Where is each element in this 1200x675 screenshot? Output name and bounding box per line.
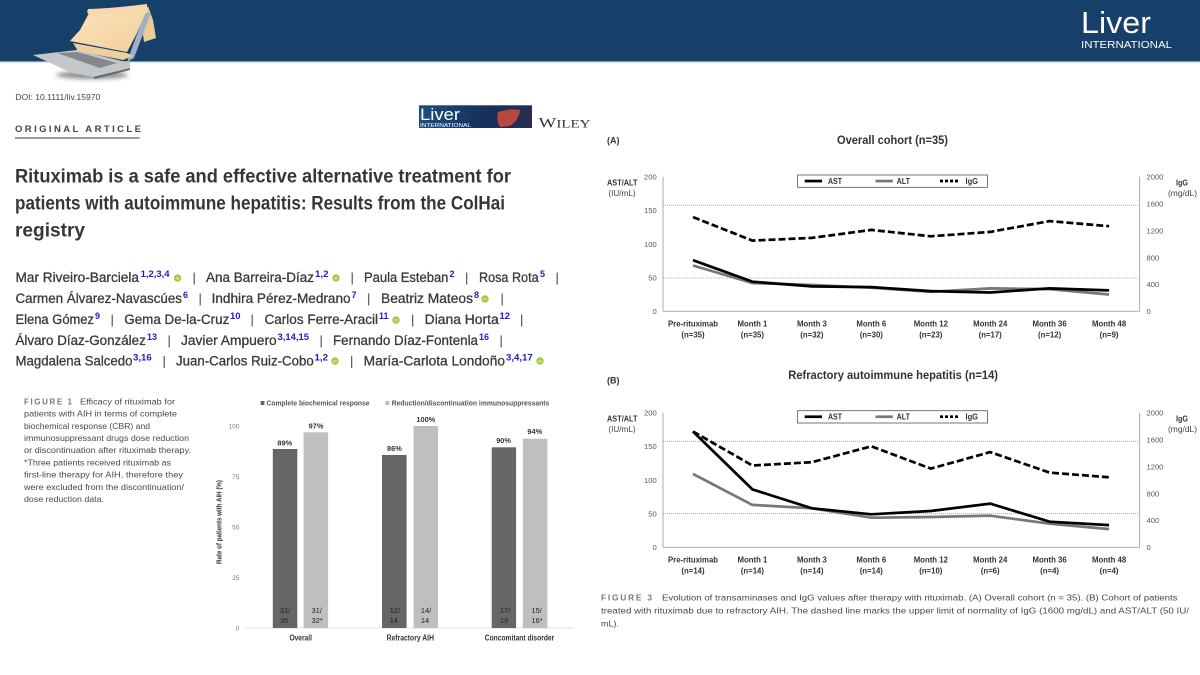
- chart B axis labels: 150: [644, 442, 657, 451]
- authors line 4: Álvaro Díaz-González: [16, 333, 146, 348]
- chart B axis labels: 200: [644, 408, 657, 418]
- bars: refractory AIH: [382, 415, 438, 642]
- article title: registry: [15, 220, 85, 242]
- publisher logos: INTERNATIONAL: [420, 123, 472, 129]
- bars: overall: 35: [280, 616, 288, 625]
- bar chart y axis: 25: [232, 575, 240, 582]
- bars: overall: 31/: [312, 606, 323, 615]
- bars: refractory AIH: 86%: [387, 444, 402, 453]
- figure 1 caption: dose reduction data.: [24, 494, 104, 504]
- chart B axis labels: AST/ALT: [607, 414, 638, 424]
- chart A x labels: Month 3: [797, 320, 828, 328]
- chart A axis labels: 200: [644, 172, 657, 182]
- bars: concomitant disorder: 90%: [496, 436, 511, 445]
- chart B legend: ALT: [897, 412, 910, 422]
- bars: refractory AIH: 14/: [421, 606, 432, 615]
- chart B axis labels: IgG: [1176, 414, 1188, 424]
- chart A axis labels: 50: [648, 274, 657, 282]
- authors line 3: Gema De-la-Cruz: [124, 312, 230, 327]
- chart A axis labels: 2000: [1146, 172, 1163, 182]
- figure 1 caption: *Three patients received rituximab as: [24, 457, 171, 467]
- DOI: DOI: 10.1111/liv.15970: [15, 92, 101, 102]
- authors line 3: 12: [500, 311, 510, 321]
- authors line 2: [16, 290, 504, 306]
- chart B legend: [798, 411, 988, 423]
- figure 1 caption: FIGURE 1: [24, 397, 73, 406]
- authors line 1: Paula Esteban: [364, 270, 448, 285]
- chart A x labels: Month 12: [914, 320, 949, 328]
- chart B legend: IgG: [966, 412, 978, 422]
- authors line 4: Javier Ampuero: [181, 333, 277, 348]
- authors line 2: |: [198, 291, 202, 306]
- authors line 1: |: [556, 270, 559, 285]
- authors line 1: iD: [176, 276, 180, 280]
- chart A x labels: (n=9): [1100, 330, 1119, 340]
- authors line 3: 9: [95, 311, 100, 321]
- panel A title: Overall cohort (n=35): [837, 135, 948, 147]
- chart B axis labels: (IU/mL): [608, 425, 636, 434]
- journal logo: Liver International: Liver: [1081, 5, 1151, 40]
- authors line 4: 3,14,15: [278, 332, 309, 342]
- chart A x labels: Month 36: [1032, 320, 1067, 328]
- publisher logos: Liver: [420, 105, 460, 124]
- chart A series ALT: [693, 266, 1109, 294]
- bars: concomitant disorder: [485, 427, 554, 642]
- chart A x labels: [668, 320, 1127, 340]
- chart A legend: AST: [828, 177, 842, 186]
- authors line 1: [16, 269, 559, 285]
- chart B x labels: Month 12: [914, 556, 949, 564]
- authors line 1: |: [350, 270, 354, 285]
- authors line 4: |: [168, 333, 171, 348]
- chart A axis labels: 1200: [1146, 226, 1163, 235]
- panel B label: (B): [607, 376, 620, 386]
- chart B axis labels: 100: [644, 476, 657, 485]
- authors line 3: |: [250, 312, 254, 327]
- bar chart y axis: 50: [232, 524, 240, 531]
- chart B x labels: (n=14): [860, 566, 883, 576]
- bars: overall: [273, 422, 328, 642]
- chart A x labels: (n=17): [979, 330, 1002, 340]
- authors line 1: |: [192, 270, 196, 285]
- publisher logos: [419, 105, 591, 132]
- chart A axis labels: [607, 172, 1197, 316]
- bars: refractory AIH: 12/: [390, 606, 401, 615]
- authors line 1: 2: [450, 269, 455, 279]
- chart B axis labels: 1600: [1146, 435, 1163, 444]
- chart B x labels: [668, 556, 1127, 576]
- authors line 3: 10: [230, 311, 240, 321]
- header banner: [0, 0, 1200, 62]
- authors line 2: Beatriz Mateos: [381, 291, 473, 306]
- journal logo: Liver International: INTERNATIONAL: [1081, 39, 1172, 51]
- figure 3 caption: mL).: [601, 618, 619, 628]
- chart A axis labels: 400: [1146, 280, 1159, 289]
- authors line 3: |: [411, 312, 414, 327]
- figure 1 caption: patients with AIH in terms of complete: [24, 408, 177, 418]
- bars: refractory AIH: Refractory AIH: [387, 634, 434, 642]
- figure 3 caption: treated with rituximab due to refractory AIH. The dashed line marks the upper limit of normality of IgG (1600 mg/dL) and AST/ALT (50 IU/: [601, 606, 1190, 616]
- chart B axis labels: 400: [1146, 516, 1159, 525]
- chart A series AST: [693, 260, 1109, 292]
- bars: overall: Overall: [289, 634, 312, 642]
- chart A x labels: (n=32): [800, 330, 824, 340]
- author list: [16, 269, 559, 368]
- chart A x labels: Month 24: [973, 320, 1008, 328]
- bar chart y axis: Rate of patients with AIH (%): [216, 480, 223, 564]
- chart B axis labels: 0: [1146, 543, 1151, 552]
- chart B series AST: [693, 432, 1109, 525]
- authors line 2: iD: [483, 297, 487, 301]
- chart A axis labels: 1600: [1146, 199, 1163, 208]
- chart B x labels: Month 1: [737, 556, 768, 564]
- bar chart y axis: [216, 423, 240, 632]
- chart A x labels: (n=30): [860, 330, 883, 340]
- authors line 1: iD: [334, 276, 338, 280]
- chart A axis labels: 800: [1146, 253, 1159, 262]
- figure 1 caption: were excluded from the discontinuation/: [23, 482, 185, 492]
- bars: overall: 31/: [280, 606, 291, 615]
- authors line 4: 13: [147, 332, 157, 342]
- authors line 3: iD: [394, 318, 398, 322]
- chart A x labels: (n=35): [741, 330, 764, 340]
- authors line 1: 1,2: [315, 269, 328, 279]
- publisher logos: W ILEY: [538, 116, 591, 132]
- bars: refractory AIH: 14: [421, 616, 429, 625]
- authors line 5: 3,4,17: [506, 352, 533, 362]
- chart B x labels: Month 24: [973, 556, 1008, 564]
- chart A x labels: (n=12): [1038, 330, 1062, 340]
- chart B x labels: Month 6: [856, 556, 887, 564]
- bars: concomitant disorder: 16*: [532, 616, 543, 625]
- authors line 5: 1,2: [314, 352, 328, 362]
- article title: Rituximab is a safe and effective alternative treatment for: [15, 166, 511, 188]
- article type label: ORIGINAL ARTICLE: [15, 124, 141, 135]
- panel A label: (A): [607, 136, 620, 146]
- bar chart: efficacy of rituximab: [216, 400, 574, 642]
- authors line 4: |: [500, 333, 503, 348]
- bars: refractory AIH: 14: [390, 616, 398, 625]
- authors line 5: iD: [333, 359, 337, 363]
- chart B axis labels: 0: [652, 543, 657, 552]
- authors line 1: 1,2,3,4: [141, 269, 170, 279]
- authors line 4: Fernando Díaz-Fontenla: [333, 333, 478, 348]
- authors line 5: María-Carlota Londoño: [364, 354, 505, 368]
- authors line 3: Elena Gómez: [16, 312, 94, 327]
- bars: concomitant disorder: Concomitant disorder: [485, 634, 554, 642]
- chart B x labels: Pre-rituximab: [668, 556, 718, 564]
- authors line 4: 16: [479, 332, 489, 342]
- chart A axis labels: AST/ALT: [607, 178, 638, 188]
- authors line 5: |: [350, 354, 353, 368]
- chart A legend: [798, 175, 988, 187]
- figure 3 caption: Evolution of transaminases and IgG values after therapy with rituximab. (A) Overall cohort (n = 35). (B) Cohort of patients: [662, 592, 1178, 602]
- figure 1 caption: immunosuppressant drugs dose reduction: [24, 433, 189, 443]
- authors line 5: 3,16: [133, 352, 152, 362]
- chart B x labels: (n=10): [919, 566, 943, 576]
- chart B series IgG: [693, 432, 1109, 477]
- bars: concomitant disorder: 94%: [527, 427, 543, 436]
- chart B x labels: (n=14): [681, 566, 705, 576]
- authors line 1: Rosa Rota: [479, 270, 539, 285]
- figure 1 caption: first-line therapy for AIH, therefore they: [24, 470, 184, 480]
- journal logo: Liver International: [1081, 5, 1172, 51]
- bars: concomitant disorder: 19: [500, 616, 508, 625]
- chart B x labels: (n=6): [981, 566, 1000, 576]
- authors line 1: 5: [540, 269, 545, 279]
- chart B x labels: Month 3: [797, 556, 828, 564]
- bars: refractory AIH: 100%: [416, 415, 436, 424]
- chart A axis labels: 0: [652, 307, 657, 316]
- authors line 1: Ana Barreira-Díaz: [206, 270, 314, 285]
- authors line 2: |: [367, 291, 370, 306]
- chart B x labels: Month 48: [1092, 556, 1127, 564]
- authors line 5: iD: [538, 359, 542, 363]
- chart B legend: AST: [828, 412, 842, 422]
- chart A x labels: Month 1: [737, 320, 768, 328]
- article title: [15, 166, 511, 242]
- line chart B: refractory autoimmune hepatitis: [607, 408, 1197, 576]
- authors line 3: |: [110, 312, 114, 327]
- authors line 1: |: [465, 270, 468, 285]
- authors line 5: Magdalena Salcedo: [16, 354, 132, 368]
- figure 1 caption: biochemical response (CBR) and: [24, 421, 150, 431]
- authors line 2: 8: [474, 290, 479, 300]
- authors line 3: Carlos Ferre-Aracil: [264, 312, 378, 327]
- bar chart legend: Complete biochemical response: [266, 400, 370, 408]
- chart A x labels: (n=23): [919, 330, 943, 340]
- chart B axis labels: 2000: [1146, 408, 1163, 418]
- chart B axis labels: 1200: [1146, 462, 1163, 471]
- bars: concomitant disorder: 15/: [532, 606, 543, 615]
- authors line 5: [16, 352, 544, 368]
- bar chart y axis: 75: [232, 474, 240, 481]
- chart A axis labels: 100: [644, 240, 657, 249]
- chart A axis labels: (IU/mL): [608, 189, 636, 198]
- chart B x labels: (n=4): [1040, 566, 1059, 576]
- authors line 3: 11: [379, 311, 388, 321]
- authors line 2: |: [500, 291, 504, 306]
- chart B x labels: (n=14): [800, 566, 824, 576]
- chart A axis labels: IgG: [1176, 178, 1188, 188]
- chart B x labels: (n=14): [741, 566, 764, 576]
- authors line 2: Indhira Pérez-Medrano: [212, 291, 351, 306]
- chart A legend: ALT: [897, 177, 910, 186]
- chart A x labels: Pre-rituximab: [668, 320, 718, 328]
- chart A axis labels: 0: [1146, 307, 1151, 316]
- chart A axis labels: (mg/dL): [1168, 189, 1197, 198]
- figure 3 caption: [601, 592, 1190, 628]
- bar chart y axis: 0: [236, 625, 240, 632]
- authors line 3: [16, 311, 523, 327]
- authors line 2: 6: [183, 290, 188, 300]
- authors line 1: Mar Riveiro-Barciela: [16, 270, 139, 285]
- chart A series IgG: [693, 217, 1109, 241]
- bar chart y axis: 100: [229, 423, 240, 430]
- bar chart legend: Reduction/discontinuation immunosuppressants: [392, 400, 549, 408]
- chart B x labels: Month 36: [1032, 556, 1067, 564]
- authors line 3: Diana Horta: [425, 312, 499, 327]
- figure 3 caption: FIGURE 3: [601, 592, 652, 602]
- chart A x labels: Month 6: [856, 320, 887, 328]
- authors line 2: Carmen Álvarez-Navascúes: [16, 291, 182, 306]
- chart B axis labels: (mg/dL): [1168, 425, 1197, 434]
- bar chart legend: [261, 400, 549, 408]
- authors line 4: |: [320, 333, 323, 348]
- chart B axis labels: 800: [1146, 489, 1159, 498]
- chart B x labels: (n=4): [1100, 566, 1119, 576]
- line chart A: overall cohort: [607, 172, 1197, 340]
- bars: overall: 89%: [277, 438, 293, 448]
- chart B series ALT: [693, 474, 1109, 529]
- chart A x labels: Month 48: [1092, 320, 1127, 328]
- chart A axis labels: 150: [644, 206, 657, 215]
- panel B title: Refractory autoimmune hepatitis (n=14): [788, 370, 998, 382]
- authors line 3: |: [520, 312, 523, 327]
- icon: laptop with paper pages: [33, 4, 156, 79]
- bars: concomitant disorder: 17/: [500, 606, 511, 615]
- authors line 4: [16, 332, 503, 348]
- figure 1 caption: or discontinuation after rituximab therapy.: [24, 445, 191, 455]
- chart A x labels: (n=35): [681, 330, 705, 340]
- authors line 5: Juan-Carlos Ruiz-Cobo: [176, 354, 314, 368]
- chart B axis labels: [607, 408, 1197, 552]
- figure 1 caption: Efficacy of rituximab for: [80, 396, 175, 406]
- bars: overall: 97%: [309, 422, 324, 430]
- chart B axis labels: 50: [648, 510, 657, 518]
- chart A legend: IgG: [966, 177, 978, 186]
- figure 1 caption: [23, 396, 191, 504]
- authors line 5: |: [162, 354, 166, 368]
- article title: patients with autoimmune hepatitis: Results from the ColHai: [15, 192, 505, 214]
- authors line 2: 7: [352, 290, 357, 300]
- bars: overall: 32*: [312, 616, 323, 625]
